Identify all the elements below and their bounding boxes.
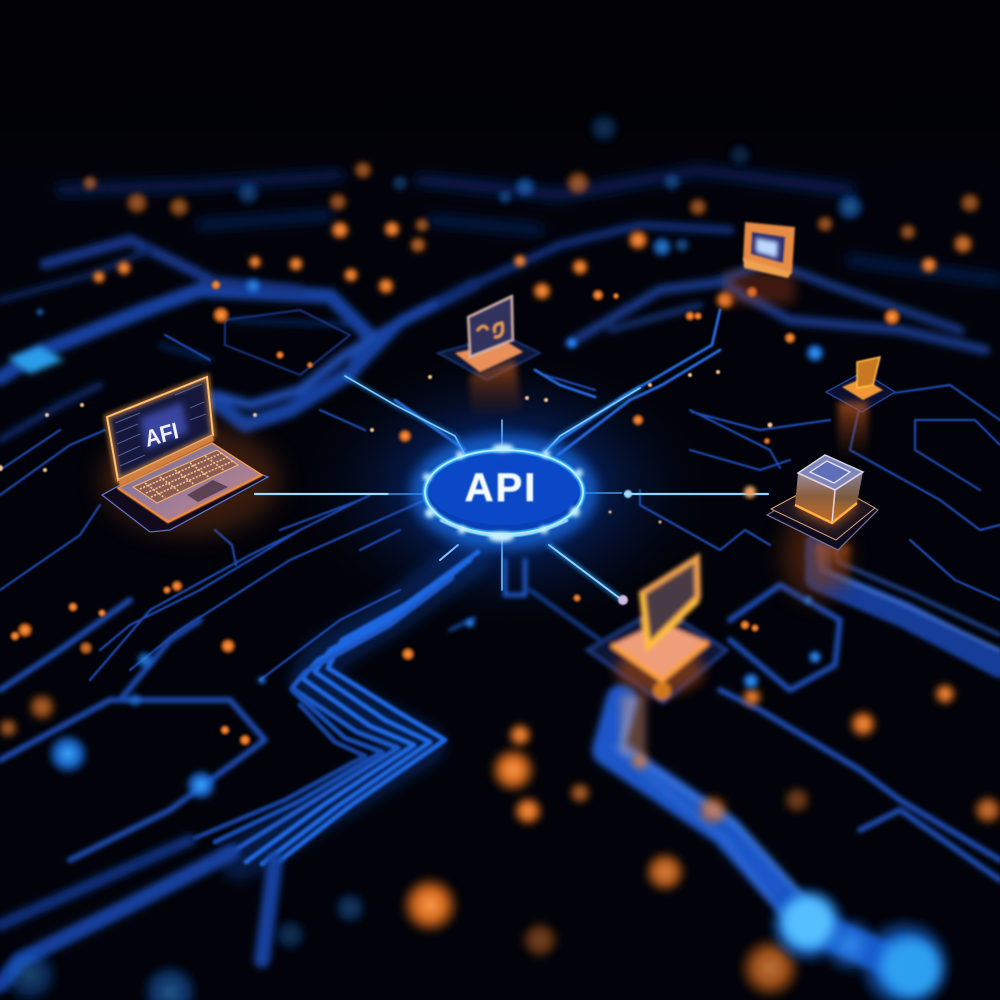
laptop trackpad bbox=[187, 480, 228, 502]
laptop screen bbox=[107, 377, 213, 480]
diagonal spokes bbox=[345, 376, 640, 600]
upper-right double trace bbox=[395, 310, 720, 455]
laptop keyboard bbox=[133, 450, 238, 503]
focus-plane orange lights bbox=[9, 279, 902, 747]
hub spokes bbox=[255, 376, 770, 605]
near orange lights bbox=[0, 682, 1000, 1000]
hub glow nodes bbox=[423, 444, 583, 542]
laptop pad bbox=[102, 470, 268, 532]
cube platform bbox=[767, 480, 878, 550]
monitor panel bbox=[642, 558, 698, 647]
central blue glow bbox=[305, 355, 705, 625]
top fade bbox=[0, 0, 1000, 180]
API hub bbox=[410, 434, 598, 550]
top-right monitor device bbox=[725, 222, 795, 304]
top panel device bbox=[438, 296, 540, 420]
cube faces bbox=[795, 473, 835, 523]
laptop base bbox=[118, 443, 262, 522]
hub label: API bbox=[465, 466, 537, 510]
bright blue flare bbox=[782, 896, 940, 996]
right spoke bbox=[585, 493, 770, 494]
laptop glow bbox=[100, 425, 280, 535]
lower monitor device bbox=[587, 558, 727, 755]
left cyan light bar bbox=[8, 346, 64, 374]
far orange lights bbox=[81, 159, 982, 311]
small tower device bbox=[826, 357, 895, 462]
cube device bbox=[767, 455, 878, 600]
laptop screen label: AFI bbox=[143, 417, 181, 452]
monitor base bbox=[612, 622, 708, 680]
bottom left trace bus bbox=[0, 552, 478, 985]
laptop device bbox=[100, 377, 280, 535]
right wide bus bbox=[818, 540, 1000, 665]
bottom right wide bus bbox=[608, 700, 900, 965]
mid-distance thin traces bbox=[0, 310, 1000, 680]
small sparks bbox=[0, 370, 852, 524]
left spoke bbox=[255, 492, 425, 496]
